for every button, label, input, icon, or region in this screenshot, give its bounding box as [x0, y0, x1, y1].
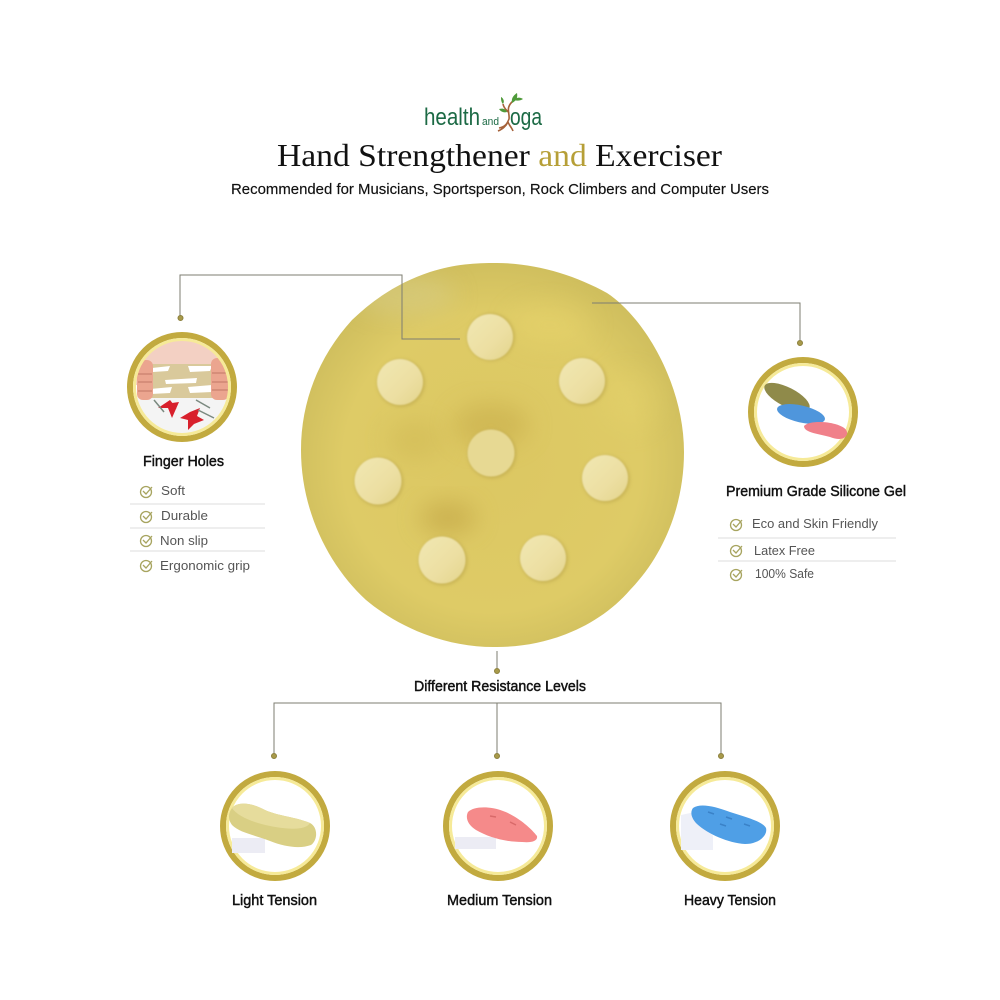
list: silicone gel benefits: 100% Safe [755, 566, 814, 581]
list: silicone gel benefits: Eco and Skin Friendly [752, 516, 878, 531]
icon: check [140, 486, 152, 498]
heading: Finger Holes: Finger Holes [143, 454, 224, 470]
icon: light tension pad [223, 774, 327, 878]
icon: check [730, 570, 742, 580]
logo: health and yoga [424, 93, 543, 131]
callout line: silicone gel [592, 303, 802, 346]
icon: check [140, 536, 152, 546]
title: Hand Strengthener and Exerciser [277, 137, 722, 173]
label: Light Tension: Light Tension [232, 893, 317, 909]
list: finger holes benefits: Non slip [160, 533, 208, 548]
list: finger holes benefits: Durable [161, 508, 208, 523]
label: Medium Tension: Medium Tension [447, 893, 552, 909]
callout line: finger holes [178, 275, 460, 339]
logo: health and yoga: health [424, 104, 480, 131]
list: silicone gel benefits: Latex Free [754, 543, 815, 558]
logo: health and yoga: oga [510, 104, 543, 131]
subtitle: Recommended for Musicians, Sportsperson, Rock Climbers and Computer Users [231, 181, 769, 198]
icon: check [140, 512, 152, 522]
icon: check [730, 546, 742, 556]
label: Heavy Tension: Heavy Tension [684, 893, 776, 909]
list: silicone gel benefits [718, 516, 896, 581]
list: finger holes benefits: Soft [161, 483, 185, 498]
connector tree: resistance levels [272, 651, 724, 758]
product: yellow silicone disc with eight holes [301, 263, 684, 647]
heading: Different Resistance Levels: Different Resistance Levels [414, 679, 586, 695]
logo: health and yoga: and [482, 116, 499, 128]
icon: silicone gel pads circle [751, 360, 855, 464]
list: finger holes benefits: Ergonomic grip [160, 558, 250, 573]
icon: medium tension pad [446, 774, 550, 878]
icon: check [730, 520, 742, 530]
icon: finger holes photo circle [130, 335, 234, 440]
icon: check [140, 560, 152, 572]
icon: heavy tension pad [673, 774, 777, 878]
heading: Premium Grade Silicone Gel: Premium Grade Silicone Gel [726, 484, 906, 500]
list: finger holes benefits [130, 483, 265, 573]
